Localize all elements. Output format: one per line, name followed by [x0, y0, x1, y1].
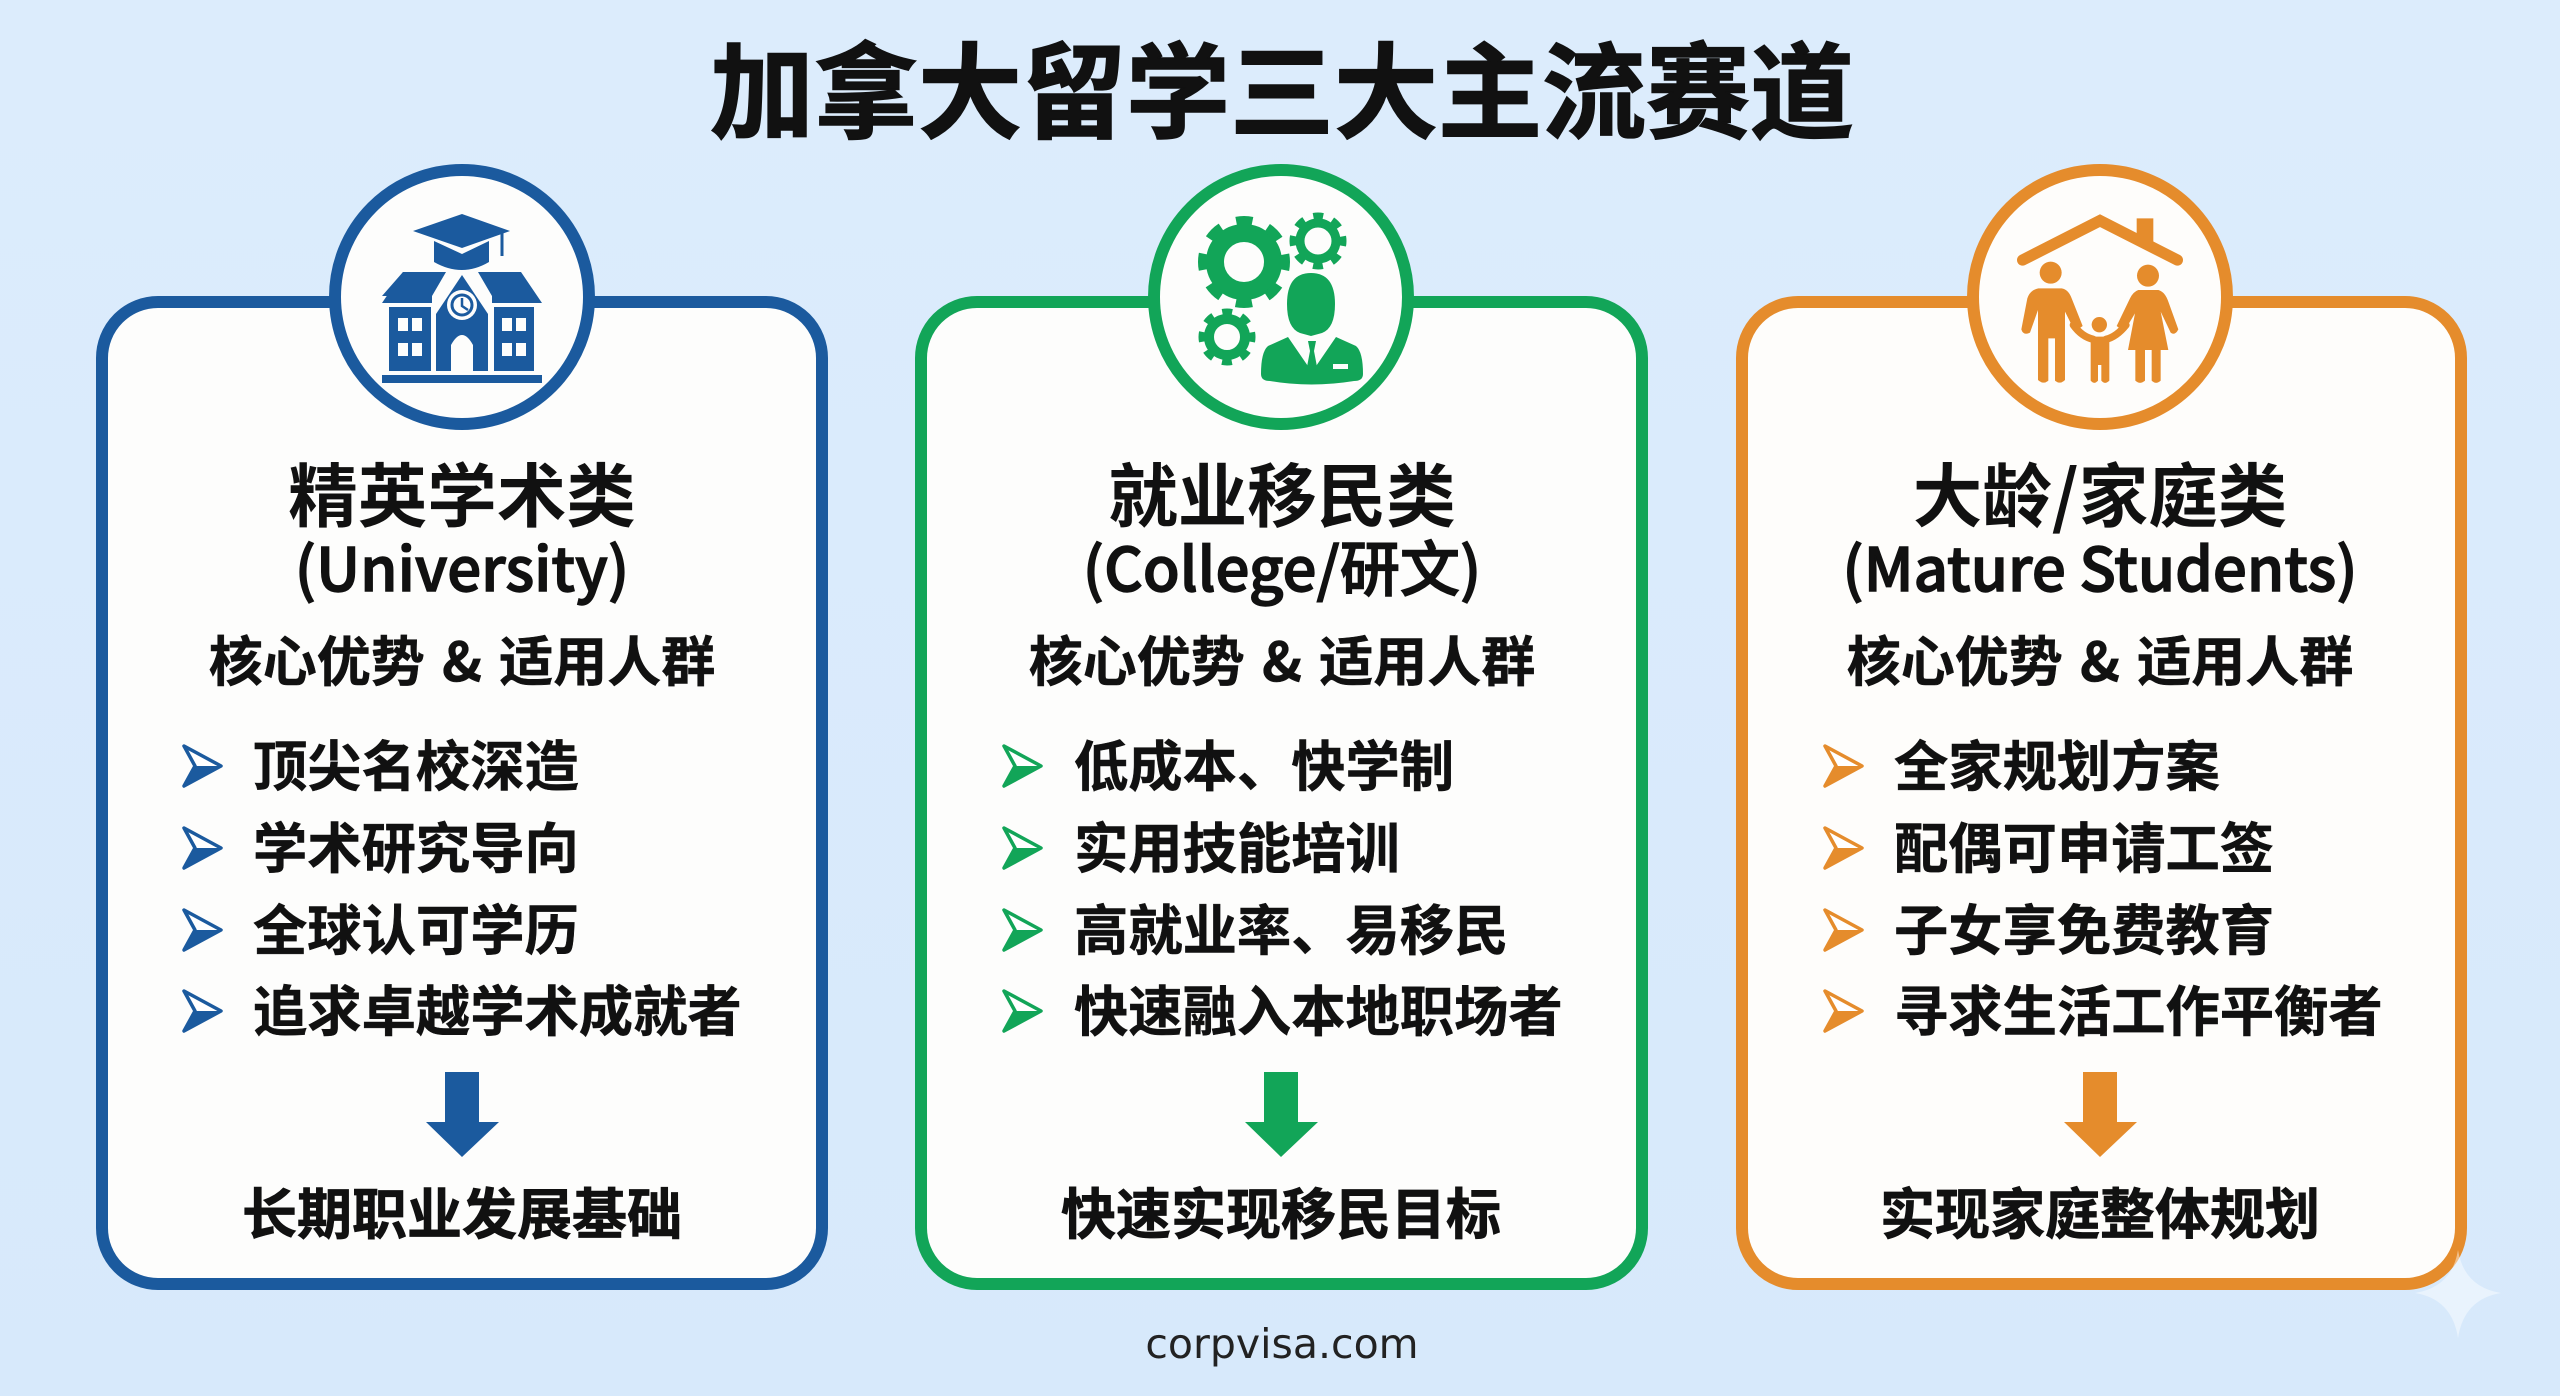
list item 2: 实用技能培训: [1074, 805, 1400, 884]
list item 3: 子女享免费教育: [1894, 887, 2274, 966]
card frame: [921, 302, 1642, 1284]
heading: category: 大龄/家庭类: [1913, 441, 2287, 542]
title: 加拿大留学三大主流赛道: [710, 9, 1854, 160]
icon badge: gears and professional: [1154, 170, 1408, 424]
icon: sparkle watermark: [2415, 1250, 2501, 1338]
arrow: down: [426, 1072, 499, 1157]
list item 4: 追求卓越学术成就者: [253, 968, 742, 1047]
heading: english name: (College/研文): [1083, 522, 1481, 609]
list item 4: 快速融入本地职场者: [1074, 968, 1563, 1047]
footer url: corpvisa.com: [1145, 1320, 1419, 1368]
arrow: down: [1245, 1072, 1318, 1157]
outcome text: 长期职业发展基础: [242, 1170, 682, 1250]
icon badge: school with graduation cap: [335, 170, 589, 424]
panel: college: [921, 170, 1642, 1284]
panel: university: [102, 170, 822, 1284]
icon badge: family under a roof: [1973, 170, 2227, 424]
list item 3: 高就业率、易移民: [1074, 887, 1508, 966]
outcome text: 快速实现移民目标: [1061, 1170, 1501, 1250]
heading: category: 就业移民类: [1108, 441, 1456, 542]
outcome text: 实现家庭整体规划: [1880, 1170, 2320, 1250]
heading: english name: (Mature Students): [1842, 522, 2358, 609]
list item 1: 顶尖名校深造: [253, 723, 579, 802]
card frame: [1742, 302, 2461, 1284]
list item 1: 低成本、快学制: [1074, 723, 1454, 802]
subheading: 核心优势 & 适用人群: [1029, 618, 1535, 697]
card frame: [102, 302, 822, 1284]
list item 2: 学术研究导向: [253, 805, 579, 884]
list item 1: 全家规划方案: [1894, 723, 2220, 802]
subheading: 核心优势 & 适用人群: [1847, 618, 2353, 697]
heading: english name: (University): [295, 522, 629, 609]
subheading: 核心优势 & 适用人群: [209, 618, 715, 697]
panel: mature students: [1742, 170, 2461, 1284]
list item 4: 寻求生活工作平衡者: [1894, 968, 2383, 1047]
heading: category: 精英学术类: [288, 441, 636, 542]
arrow: down: [2064, 1072, 2137, 1157]
list item 3: 全球认可学历: [253, 887, 579, 966]
list item 2: 配偶可申请工签: [1894, 805, 2274, 884]
